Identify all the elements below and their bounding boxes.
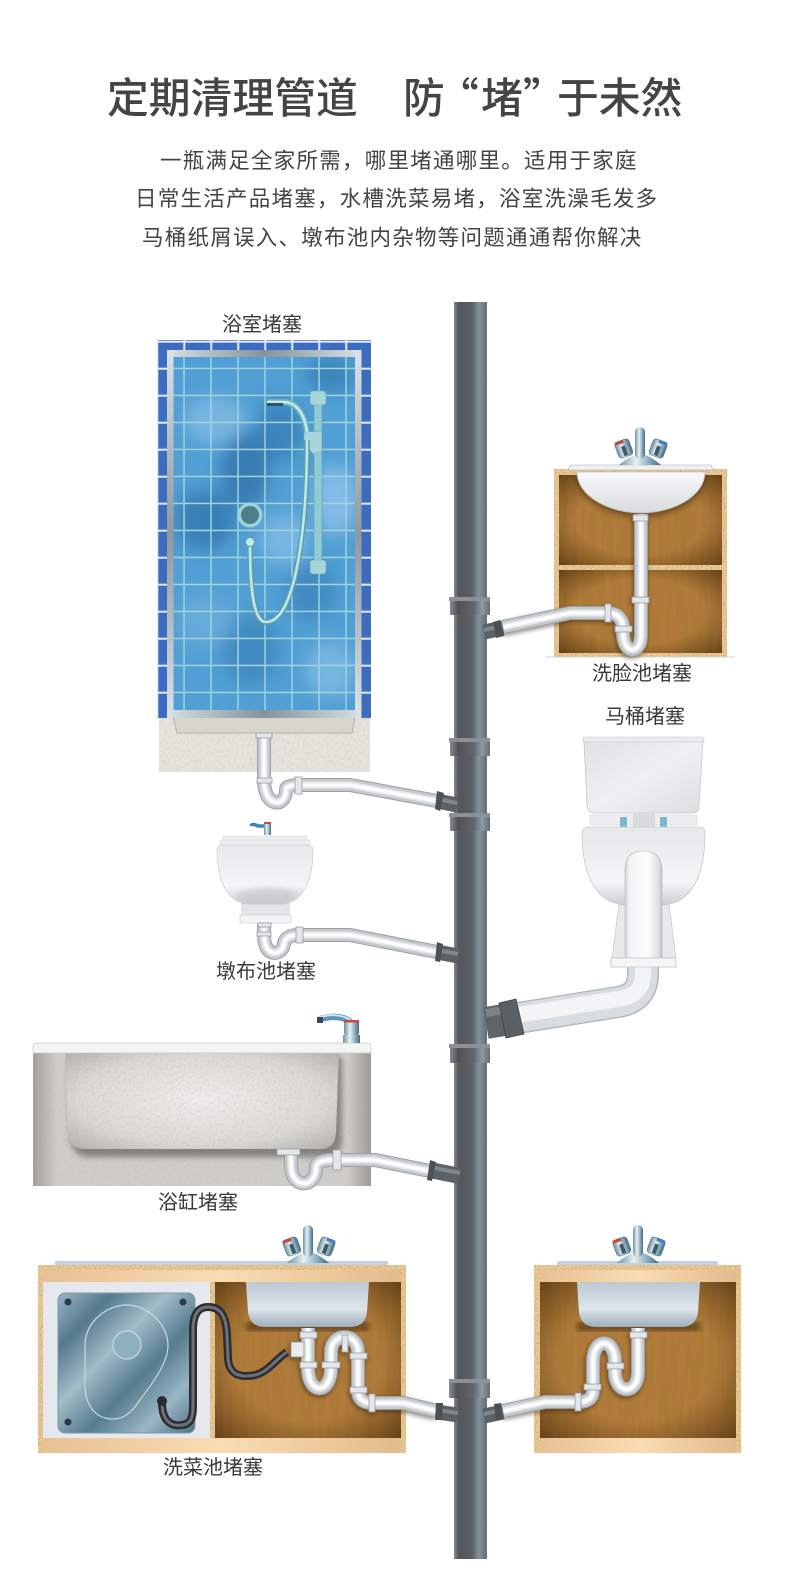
trap pipe [503, 514, 649, 650]
panel: bathtub [33, 1015, 460, 1186]
waste pipe [625, 851, 662, 958]
panel: mop sink [217, 822, 458, 962]
tub rim [33, 1043, 371, 1053]
drain hose [157, 1307, 287, 1425]
shower rail and head [267, 391, 326, 574]
faucet [251, 822, 271, 835]
outer wall tiles [157, 340, 371, 718]
intro text: 一瓶满足全家所需，哪里堵通哪里。适用于家庭 [160, 149, 638, 173]
pedestal [611, 895, 676, 967]
sink bowl [577, 1282, 700, 1331]
connector hub [484, 1403, 503, 1420]
label: kitchen sink: 洗菜池堵塞 [163, 1456, 263, 1479]
intro text: 日常生活产品堵塞，水槽洗菜易堵，浴室洗澡毛发多 [135, 187, 658, 211]
title: 于未然 [557, 75, 682, 122]
tub inner [65, 1050, 342, 1157]
sink bowl [246, 1282, 369, 1331]
trap pipe [503, 1328, 647, 1411]
basin [568, 465, 713, 517]
elbow hub [486, 999, 524, 1038]
trap pipe [257, 923, 458, 962]
panel: washbasin cabinet [484, 427, 735, 658]
trap pipe [291, 1328, 437, 1412]
tank connector [590, 813, 697, 828]
pedestal [240, 900, 291, 923]
tank [583, 737, 704, 813]
cabinet [545, 469, 735, 658]
cabinet [38, 1261, 406, 1453]
label: bathroom: 浴室堵塞 [222, 313, 302, 336]
steel frame [167, 350, 362, 718]
faucet [282, 1225, 336, 1263]
connector hub [484, 620, 504, 638]
shower hose [246, 440, 307, 622]
title: 防 [403, 75, 445, 122]
bowl [217, 836, 313, 904]
label: washbasin: 洗脸池堵塞 [592, 662, 692, 685]
tub wall [33, 1050, 371, 1186]
bowl [582, 827, 705, 905]
label: mop sink: 墩布池堵塞 [216, 960, 316, 983]
title: 定期清理管道 [107, 75, 358, 122]
shower trap pipe [256, 733, 457, 811]
label: toilet: 马桶堵塞 [605, 705, 685, 728]
connector hub [435, 1403, 458, 1420]
trap pipe [277, 1149, 430, 1183]
main drain pipe [449, 302, 490, 1559]
connector hub [427, 1160, 460, 1181]
label: bathtub: 浴缸堵塞 [158, 1191, 238, 1214]
shower dial [238, 502, 262, 528]
intro text [135, 149, 658, 250]
title: 堵 [481, 75, 523, 122]
elbow [518, 958, 676, 1018]
panel: shower [157, 340, 371, 772]
glass with tile wall [173, 357, 357, 710]
panel: kitchen sink with dishwasher [38, 1225, 458, 1453]
title: ” [523, 66, 565, 126]
shower base [159, 716, 370, 772]
tub faucet [317, 1015, 360, 1043]
intro text: 马桶纸屑误入、墩布池内杂物等问题通通帮你解决 [142, 226, 643, 250]
cabinet [534, 1261, 741, 1453]
faucet [612, 1225, 666, 1263]
panel: right kitchen sink [484, 1225, 741, 1453]
panel: toilet [486, 737, 705, 1038]
title: “ [437, 66, 479, 126]
faucet [614, 427, 668, 465]
appliance plate [58, 1293, 195, 1433]
